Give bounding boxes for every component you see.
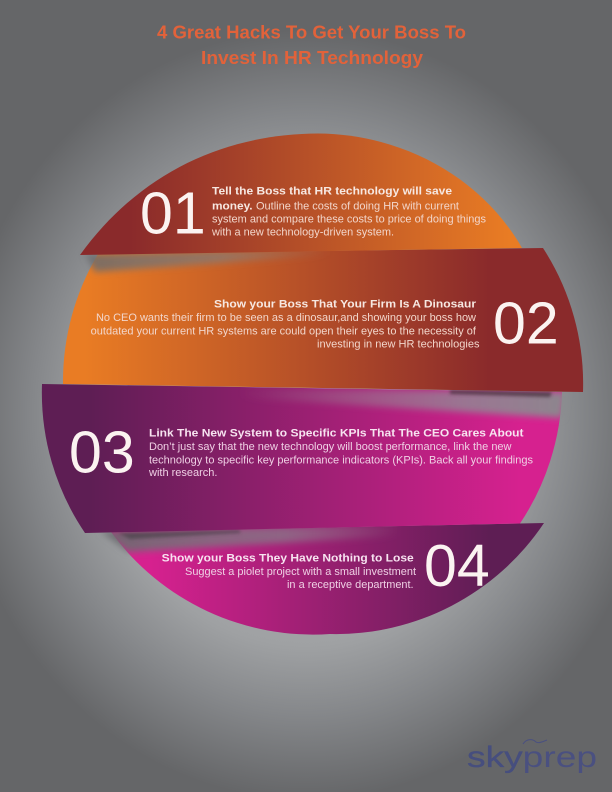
segment 01 heading and body text: with a new technology-driven system. [211, 226, 394, 238]
title: 4 Great Hacks To Get Your Boss To [157, 22, 466, 42]
segment 01 number: 01 [140, 180, 206, 246]
title: Invest In HR Technology [201, 48, 423, 68]
panel: segment 01 [80, 134, 522, 255]
segment 01 heading and body text [211, 185, 486, 238]
segment 04 body text: in a receptive department. [287, 579, 414, 591]
title [157, 22, 466, 68]
segment 04 shadow [100, 524, 400, 552]
segment 02 shape [63, 248, 583, 392]
segment 03 heading: Link The New System to Specific KPIs That The CEO Cares About [149, 428, 524, 440]
panel: segment 04 [100, 523, 544, 635]
segment 02 number: 02 [493, 290, 559, 356]
logo wordmark: sky prep [467, 741, 597, 774]
segment 03 body text: with research. [148, 467, 218, 479]
segment 02 body text [91, 312, 479, 350]
segment 01 heading and body text: Tell the Boss that HR technology will save [212, 185, 452, 197]
segment 02 heading: Show your Boss That Your Firm Is A Dinosaur [214, 299, 477, 311]
segment 03 body text: technology to specific key performance indicators (KPIs). Back all your findings [149, 454, 533, 466]
segment 04 heading: Show your Boss They Have Nothing to Lose [162, 553, 414, 565]
panel: segment 03 [42, 384, 566, 533]
segment 01 heading and body text: money. [212, 200, 253, 212]
segment 02 shadow [85, 249, 330, 272]
panel: segment 02 [63, 248, 583, 392]
segment 03 number: 03 [69, 420, 135, 486]
segment 04 body text [185, 566, 416, 591]
segment 01 heading and body text: system and compare these costs to price of doing things [212, 213, 486, 225]
segment 04 shape [111, 523, 544, 635]
segment 03 body text: Don’t just say that the new technology will boost performance, link the new [149, 441, 512, 453]
icon: bird arc [523, 740, 547, 744]
segment 03 body text [148, 441, 533, 479]
segment 03 shadow [240, 388, 566, 418]
segment 04 body text: Suggest a piolet project with a small investment [185, 566, 416, 578]
segment 04 number: 04 [424, 533, 490, 599]
segment 02 body text: outdated your current HR systems are could open their eyes to the necessity of [91, 325, 476, 337]
segment 01 heading and body text: Outline the costs of doing HR with current [256, 200, 459, 212]
segment 02 body text: No CEO wants their firm to be seen as a dinosaur,and showing your boss how [96, 312, 476, 324]
segment 02 body text: investing in new HR technologies [317, 338, 480, 350]
logo: skyprep [467, 740, 597, 774]
segment 03 shape [42, 384, 562, 533]
segment 01 shape [80, 134, 522, 255]
